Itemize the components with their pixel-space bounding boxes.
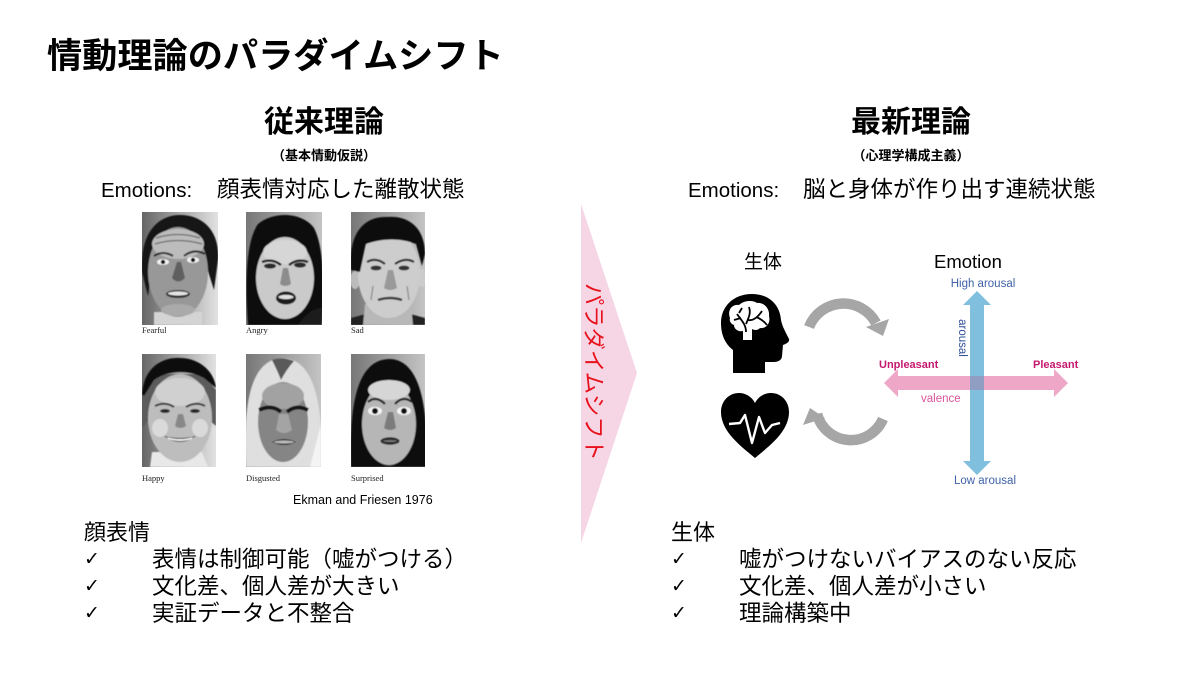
list: facial expression points: 顔表情 [84, 520, 150, 545]
heading: conventional theory: 従来理論 [264, 106, 384, 139]
list: body points: ✓ [671, 575, 687, 597]
infographic slide [48, 37, 1095, 623]
label: high arousal: High arousal [951, 278, 1015, 290]
subheading: basic emotion hypothesis: （基本情動仮説） [272, 148, 376, 163]
list: facial expression points: ✓ [84, 575, 100, 597]
citation: Ekman and Friesen 1976 [293, 493, 433, 507]
emotions definition: discrete [101, 177, 465, 202]
title: 情動理論のパラダイムシフト [47, 36, 504, 76]
arrow: paradigm shift [581, 204, 637, 543]
photo captions: Sad [351, 325, 364, 335]
list: body points: 理論構築中 [739, 601, 852, 626]
label: body: 生体 [744, 251, 782, 273]
axes overlap [970, 376, 984, 390]
subheading: psychological constructionism: （心理学構成主義） [852, 148, 970, 163]
arrow: paradigm shift: パラダイムシフト [581, 283, 606, 461]
list: facial expression points: 文化差、個人差が大きい [152, 574, 400, 599]
label: valence: valence [921, 393, 961, 405]
panel: conventional theory [84, 106, 467, 626]
photo captions: Fearful [142, 325, 167, 335]
list: facial expression points: ✓ [84, 602, 100, 624]
photo captions: Happy [142, 473, 165, 483]
list: body points: ✓ [671, 602, 687, 624]
emotions definition: continuous: 脳と身体が作り出す連続状態 [803, 177, 1096, 202]
list: facial expression points: 表情は制御可能（嘘がつける） [152, 547, 467, 572]
photo grid: Ekman faces [142, 212, 427, 483]
axis: arousal [963, 291, 991, 475]
label: emotion: Emotion [934, 251, 1002, 272]
icon: head with brain [721, 294, 789, 373]
face: surprised [351, 354, 427, 467]
face: angry [246, 212, 323, 325]
list: facial expression points [84, 520, 467, 626]
photo captions: Angry [246, 325, 268, 335]
panel: latest theory [671, 106, 1096, 626]
face: sad [350, 212, 427, 325]
face: fearful [142, 212, 218, 325]
list: body points: 生体 [671, 520, 715, 545]
label: pleasant: Pleasant [1033, 359, 1079, 371]
list: facial expression points: 実証データと不整合 [152, 601, 355, 626]
photo captions [142, 325, 384, 483]
list: body points: 文化差、個人差が小さい [739, 574, 987, 599]
list: body points [671, 520, 1077, 626]
arrow: body to emotion [809, 304, 889, 336]
face: disgusted [245, 354, 322, 467]
axis: valence [884, 369, 1068, 397]
list: body points: ✓ [671, 548, 687, 570]
label: low arousal: Low arousal [954, 475, 1016, 487]
photo captions: Disgusted [246, 473, 281, 483]
label: arousal: arousal [956, 319, 968, 357]
list: body points: 嘘がつけないバイアスのない反応 [739, 547, 1077, 572]
icon: heart with pulse [721, 393, 789, 458]
arrow: emotion to body [803, 408, 883, 440]
heading: latest theory: 最新理論 [851, 106, 971, 139]
face: happy [142, 354, 216, 467]
photo captions: Surprised [351, 473, 384, 483]
label: unpleasant: Unpleasant [879, 359, 939, 371]
emotions definition: discrete: 顔表情対応した離散状態 [217, 177, 465, 202]
emotions definition: discrete: Emotions: [101, 179, 192, 202]
chart: valence-arousal axes [879, 278, 1079, 487]
list: facial expression points: ✓ [84, 548, 100, 570]
emotions definition: continuous: Emotions: [688, 179, 779, 202]
